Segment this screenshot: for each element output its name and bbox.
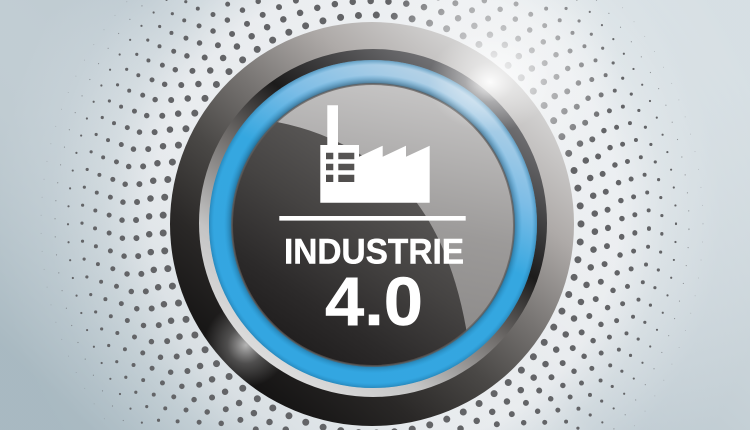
heading: INDUSTRIE: INDUSTRIE [284, 232, 464, 272]
outer rim [170, 22, 574, 426]
divider line [279, 216, 466, 221]
heading: 4.0: 4.0 [325, 263, 423, 340]
icon: factory [320, 105, 430, 203]
button [170, 22, 574, 426]
inner disc [232, 84, 514, 366]
dot fade near the highlight [370, 0, 620, 195]
top right glare [428, 32, 552, 132]
disc edge [232, 84, 514, 366]
blue light ring [209, 60, 537, 388]
blue ring inner and outer shading [209, 60, 537, 388]
dark reflection shape [225, 122, 470, 375]
rim highlight lower left [208, 314, 276, 384]
dark groove and silver edge [199, 49, 547, 397]
